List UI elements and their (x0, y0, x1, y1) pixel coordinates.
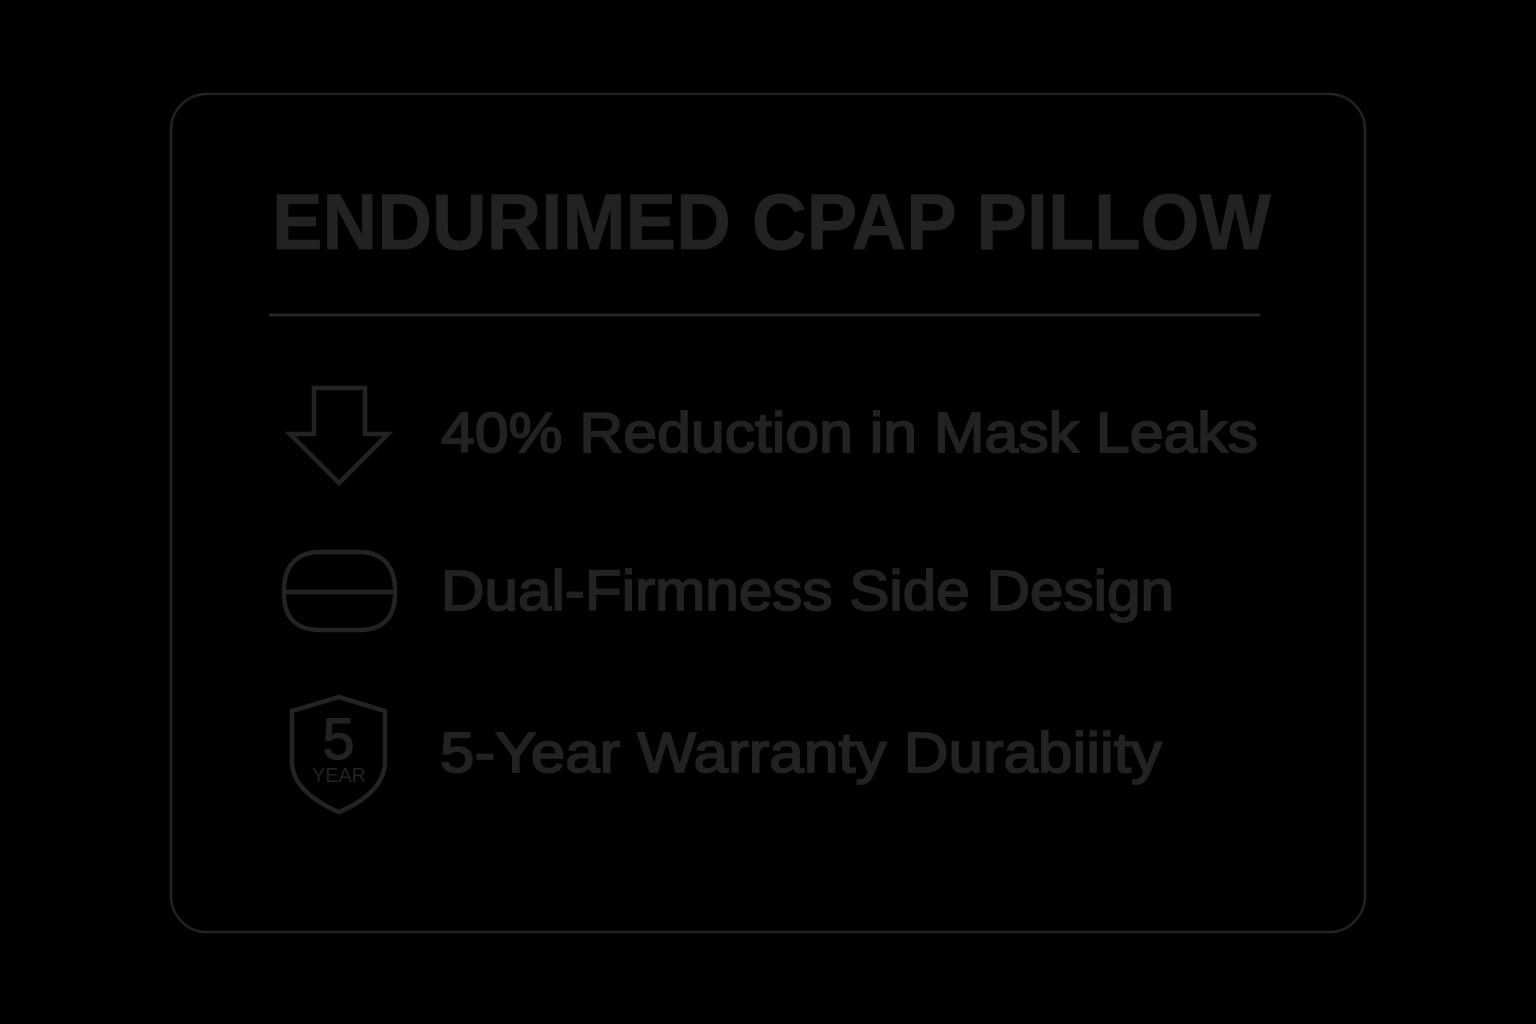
icon: five-year shield: YEAR (312, 765, 366, 787)
feature row: warranty (292, 697, 1163, 812)
feature row: dual firmness (284, 552, 1174, 630)
panel: product card (171, 94, 1365, 932)
feature text: leaks: 40% Reduction in Mask Leaks (441, 401, 1258, 465)
icon: down arrow (290, 388, 388, 483)
feature text: firmness: Dual-Firmness Side Design (441, 559, 1174, 623)
title: ENDURIMED CPAP PILLOW (272, 177, 1271, 266)
icon: five-year shield (292, 697, 385, 812)
icon: pillow (284, 552, 395, 630)
card outline (171, 94, 1365, 932)
icon: five-year shield: 5 (322, 707, 355, 772)
feature row: mask leak reduction (290, 388, 1258, 483)
feature text: warranty: 5-Year Warranty Durabiiity (440, 721, 1163, 785)
